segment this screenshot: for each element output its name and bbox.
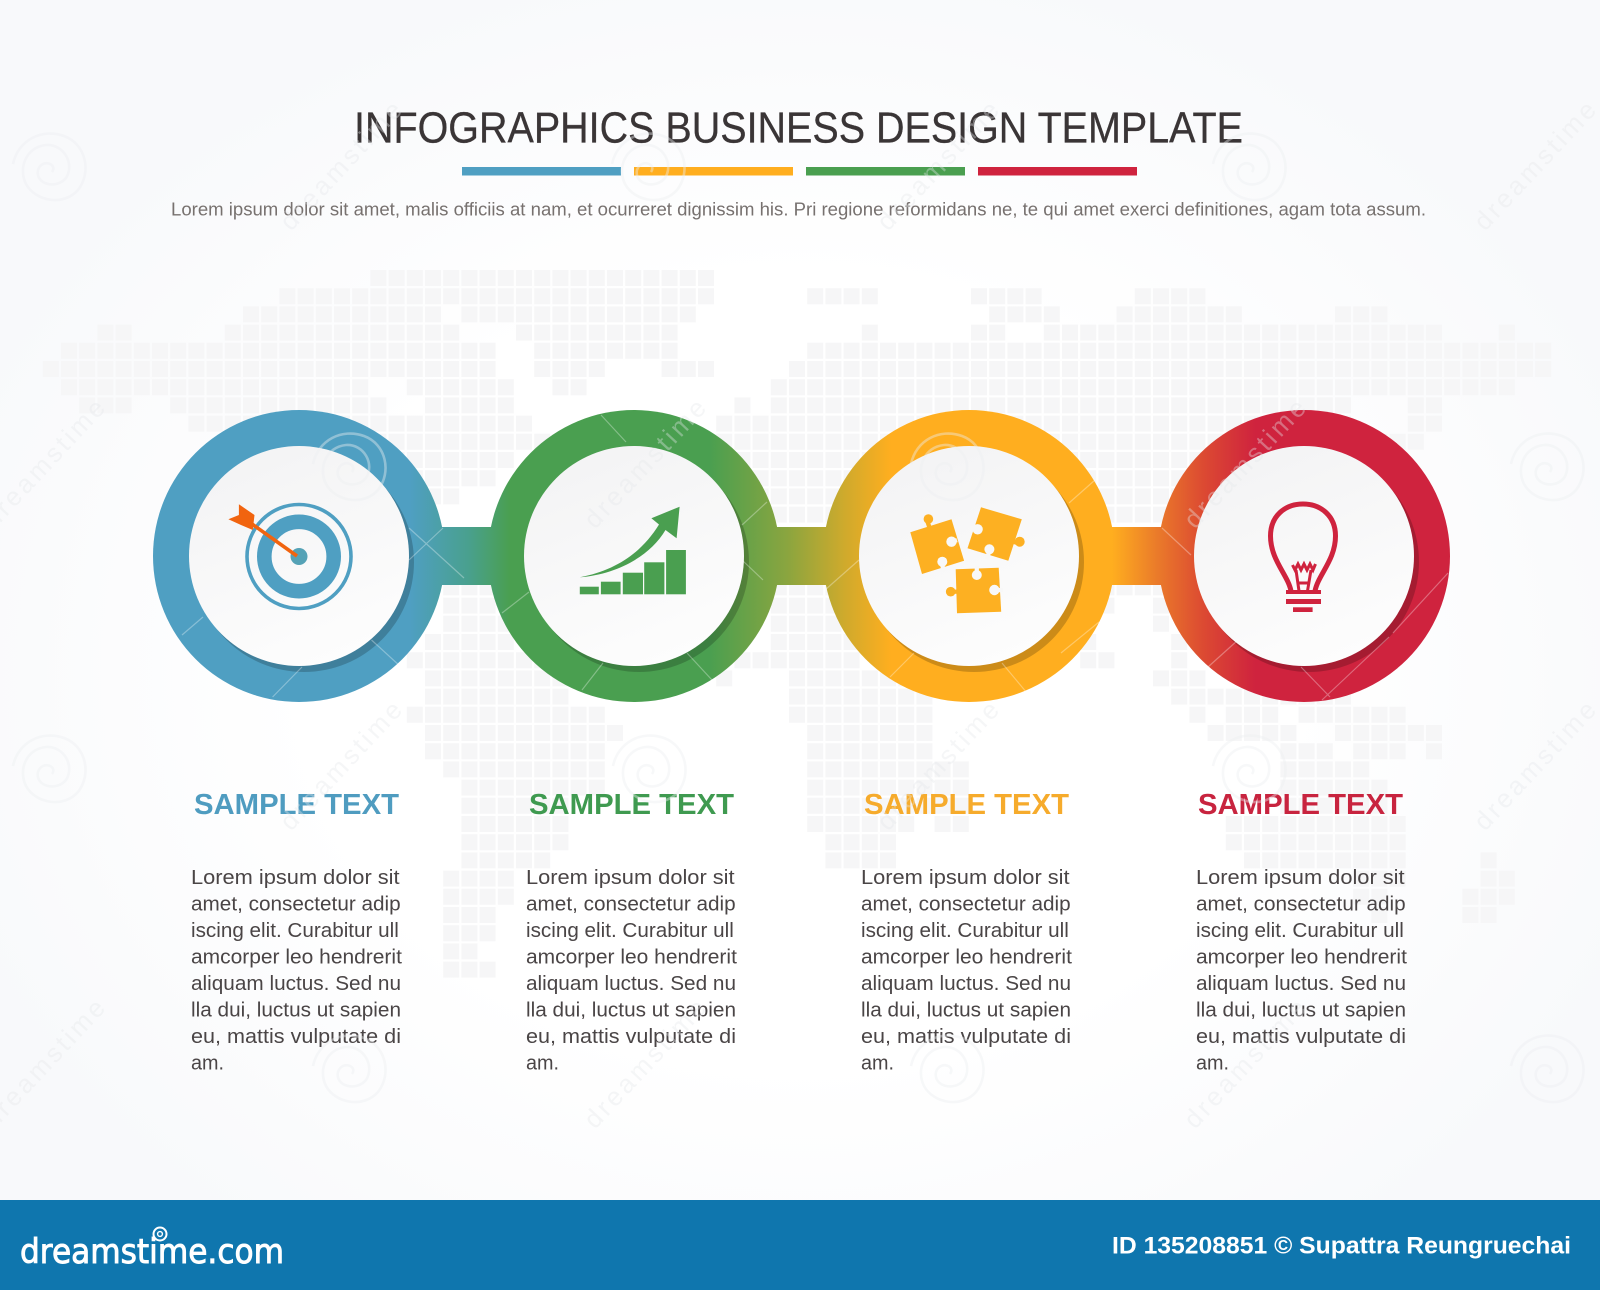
body text: column 3: iscing elit. Curabitur ull [861, 920, 1069, 942]
icon: puzzle pieces [910, 507, 1025, 613]
body text: column 3: lla dui, luctus ut sapien [861, 1000, 1071, 1022]
timeline chain of four connected rings [153, 410, 1450, 702]
body text: column 2: am. [526, 1052, 559, 1074]
body text: column 2: iscing elit. Curabitur ull [526, 920, 734, 942]
body text: column 1: amet, consectetur adip [191, 894, 401, 916]
watermark diagonal wordmarks: dreamstime [870, 95, 1005, 236]
watermark diagonal wordmarks: dreamstime [273, 695, 408, 836]
heading: column 4: SAMPLE TEXT [1198, 789, 1404, 821]
body text: column 1: amcorper leo hendrerit [191, 946, 402, 968]
body text: column 1: Lorem ipsum dolor sit [191, 867, 400, 889]
watermark diagonal wordmarks: dreamstime [577, 993, 712, 1134]
watermark thin crossing lines [182, 415, 1448, 700]
body text: column 4: eu, mattis vulputate di [1196, 1026, 1406, 1048]
body text: column 1 [191, 867, 402, 1074]
body text: column 3: amet, consectetur adip [861, 894, 1071, 916]
body text: column 2: eu, mattis vulputate di [526, 1026, 736, 1048]
panel: column 4 text [1196, 789, 1407, 1074]
body text: column 3: aliquam luctus. Sed nu [861, 973, 1071, 995]
panel: column 3 text [861, 789, 1072, 1074]
body text: column 2: lla dui, luctus ut sapien [526, 1000, 736, 1022]
body text: column 3 [861, 867, 1072, 1074]
icon: target with arrow [228, 504, 351, 608]
watermark diagonal wordmarks: dreamstime [577, 393, 712, 534]
body text: column 4: aliquam luctus. Sed nu [1196, 973, 1406, 995]
watermark diagonal wordmarks: dreamstime [870, 695, 1005, 836]
panel: column 2 text [526, 789, 737, 1074]
body text: column 1: eu, mattis vulputate di [191, 1026, 401, 1048]
footer logo wordmark: dreamstime.com [20, 1232, 284, 1272]
body text: column 3: Lorem ipsum dolor sit [861, 867, 1070, 889]
panel: step 1 target disc [189, 446, 414, 672]
watermark diagonal wordmarks: dreamstime [273, 95, 408, 236]
icon: growth bar chart with arrow [580, 507, 686, 594]
panel: step 3 puzzle disc [859, 446, 1084, 672]
body text: column 4: lla dui, luctus ut sapien [1196, 1000, 1406, 1022]
body text: column 1: aliquam luctus. Sed nu [191, 973, 401, 995]
body text: column 2: amet, consectetur adip [526, 894, 736, 916]
body text: column 2: Lorem ipsum dolor sit [526, 867, 735, 889]
watermark diagonal wordmarks: dreamstime [1467, 95, 1600, 236]
watermark diagonal wordmarks: dreamstime [1177, 993, 1312, 1134]
panel: step 2 growth disc [524, 446, 749, 672]
world map dot grid background [43, 278, 1551, 970]
heading: column 1: SAMPLE TEXT [194, 789, 400, 821]
body text: column 1: am. [191, 1052, 224, 1074]
body text: column 3: amcorper leo hendrerit [861, 946, 1072, 968]
body text: column 4: Lorem ipsum dolor sit [1196, 867, 1405, 889]
body text: column 3: eu, mattis vulputate di [861, 1026, 1071, 1048]
body text: column 2: amcorper leo hendrerit [526, 946, 737, 968]
body text: column 1: lla dui, luctus ut sapien [191, 1000, 401, 1022]
subtitle text: Lorem ipsum dolor sit amet, malis officiis at nam, et ocurreret dignissim his. Pri regione reformidans ne, te qui amet exerci definitiones, agam tota assum. [171, 198, 1426, 220]
body text: column 4: iscing elit. Curabitur ull [1196, 920, 1404, 942]
body text: column 1: iscing elit. Curabitur ull [191, 920, 399, 942]
footer image ID and credit: ID 135208851 © Supattra Reungruechai [1112, 1232, 1571, 1260]
footer banner [0, 1200, 1600, 1290]
title: INFOGRAPHICS BUSINESS DESIGN TEMPLATE [354, 104, 1243, 152]
watermark diagonal wordmarks: dreamstime [1177, 393, 1312, 534]
body text: column 2: aliquam luctus. Sed nu [526, 973, 736, 995]
icon: light bulb [1270, 504, 1336, 612]
body text: column 4: amcorper leo hendrerit [1196, 946, 1407, 968]
watermark diagonal wordmarks: dreamstime [1467, 695, 1600, 836]
body text: column 4: am. [1196, 1052, 1229, 1074]
title colour underline bars [462, 167, 1137, 176]
heading: column 3: SAMPLE TEXT [864, 789, 1070, 821]
panel: step 4 idea disc [1194, 446, 1419, 672]
body text: column 4 [1196, 867, 1407, 1074]
heading: column 2: SAMPLE TEXT [529, 789, 735, 821]
body text: column 3: am. [861, 1052, 894, 1074]
body text: column 4: amet, consectetur adip [1196, 894, 1406, 916]
panel: column 1 text [191, 789, 402, 1074]
body text: column 2 [526, 867, 737, 1074]
watermark spirals [13, 134, 1584, 1102]
